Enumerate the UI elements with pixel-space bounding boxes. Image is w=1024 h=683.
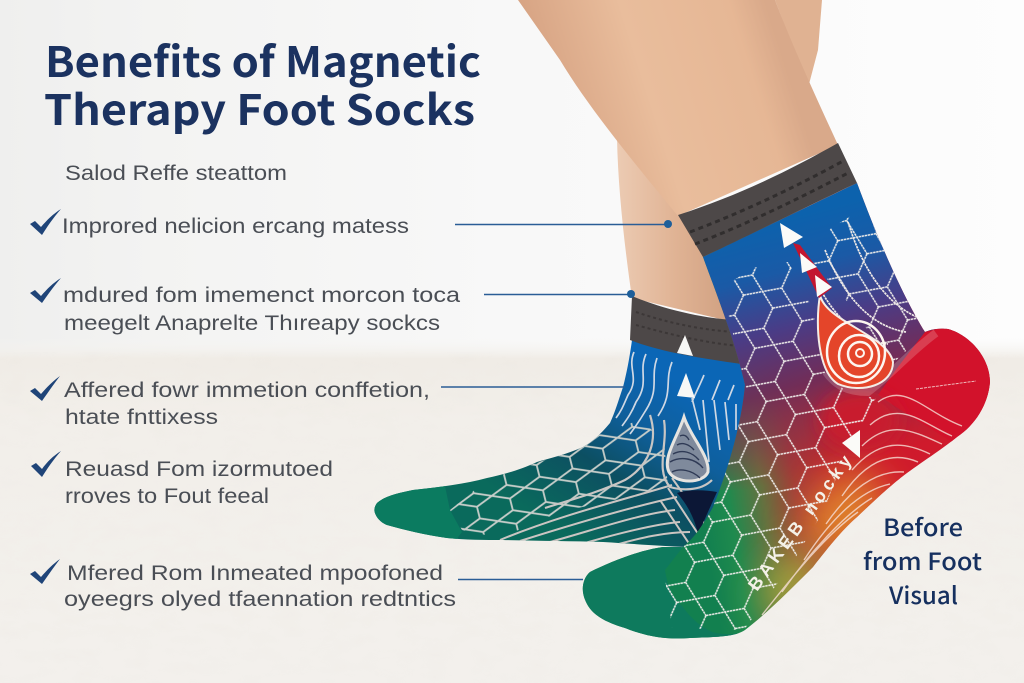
title [44,29,481,138]
sole contour lines [762,395,962,615]
before label: Before [883,508,963,543]
back sock wavy lines [616,352,736,462]
blue to purple top [690,170,990,490]
callout line 1 [455,220,672,228]
benefit 2: meegelt Anaprelte Thıreapy sockcs [64,312,440,335]
benefit 4: rroves to Fout feeal [65,485,269,508]
front sock cuff [678,143,857,257]
benefit 5: Mfered Rom Inmeated mpoofoned [67,562,443,585]
mesh [666,216,918,630]
benefit 3 [30,376,430,429]
benefit 5: oyeegrs olyed tfaennation redtntics [64,588,456,611]
front sock arrows [780,223,860,458]
front leg [518,0,838,216]
back sock coil [667,417,708,481]
background carpet [0,338,1024,683]
callout line 2 [484,290,635,298]
subtitle: Salod Reffe steattom [65,162,287,185]
before label [863,508,983,611]
benefit 1 [30,209,409,238]
front sock [570,143,1000,650]
red arrow track [793,243,832,298]
red heel [878,328,990,442]
front sock body [582,183,990,638]
title: Therapy Foot Socks [44,77,475,138]
white stitched band [826,333,936,392]
back sock [374,296,745,547]
title: Benefits of Magnetic [45,29,481,90]
benefit 5 [30,559,456,611]
back sock heel shadow [677,490,717,534]
background wall [0,0,1024,365]
orange sole glow [788,456,902,574]
sock print lettering: BAKEB nocky [744,452,855,594]
benefit 2: mdured fom imemenct morcon toca [63,284,460,307]
icon: check mark [30,376,60,401]
icon: check mark [30,559,60,584]
back sock cuff [630,296,741,364]
callout line 3 [441,386,625,388]
magnetic coil [818,295,893,388]
benefit 1: Improred nelicion ercang matess [62,215,409,238]
benefit 4 [31,451,333,508]
back sock mesh [450,422,668,535]
back sock body [374,340,745,547]
icon: check mark [31,451,61,477]
before label: Visual [888,576,958,611]
before label: from Foot [863,542,983,577]
benefit 3: htate fnttixess [65,406,218,429]
back leg [617,0,822,322]
back sock arrows [677,335,695,398]
benefit 3: Affered fowr immetion conffetion, [64,379,430,402]
icon: check mark [30,278,61,303]
benefit 4: Reuasd Fom izormutoed [65,458,333,481]
callout line 4 [458,578,583,580]
benefit 2 [30,278,460,335]
icon: check mark [30,209,61,235]
toe [582,547,739,638]
back sock lower contour lines [500,478,716,546]
upper mesh long lines [822,220,916,345]
